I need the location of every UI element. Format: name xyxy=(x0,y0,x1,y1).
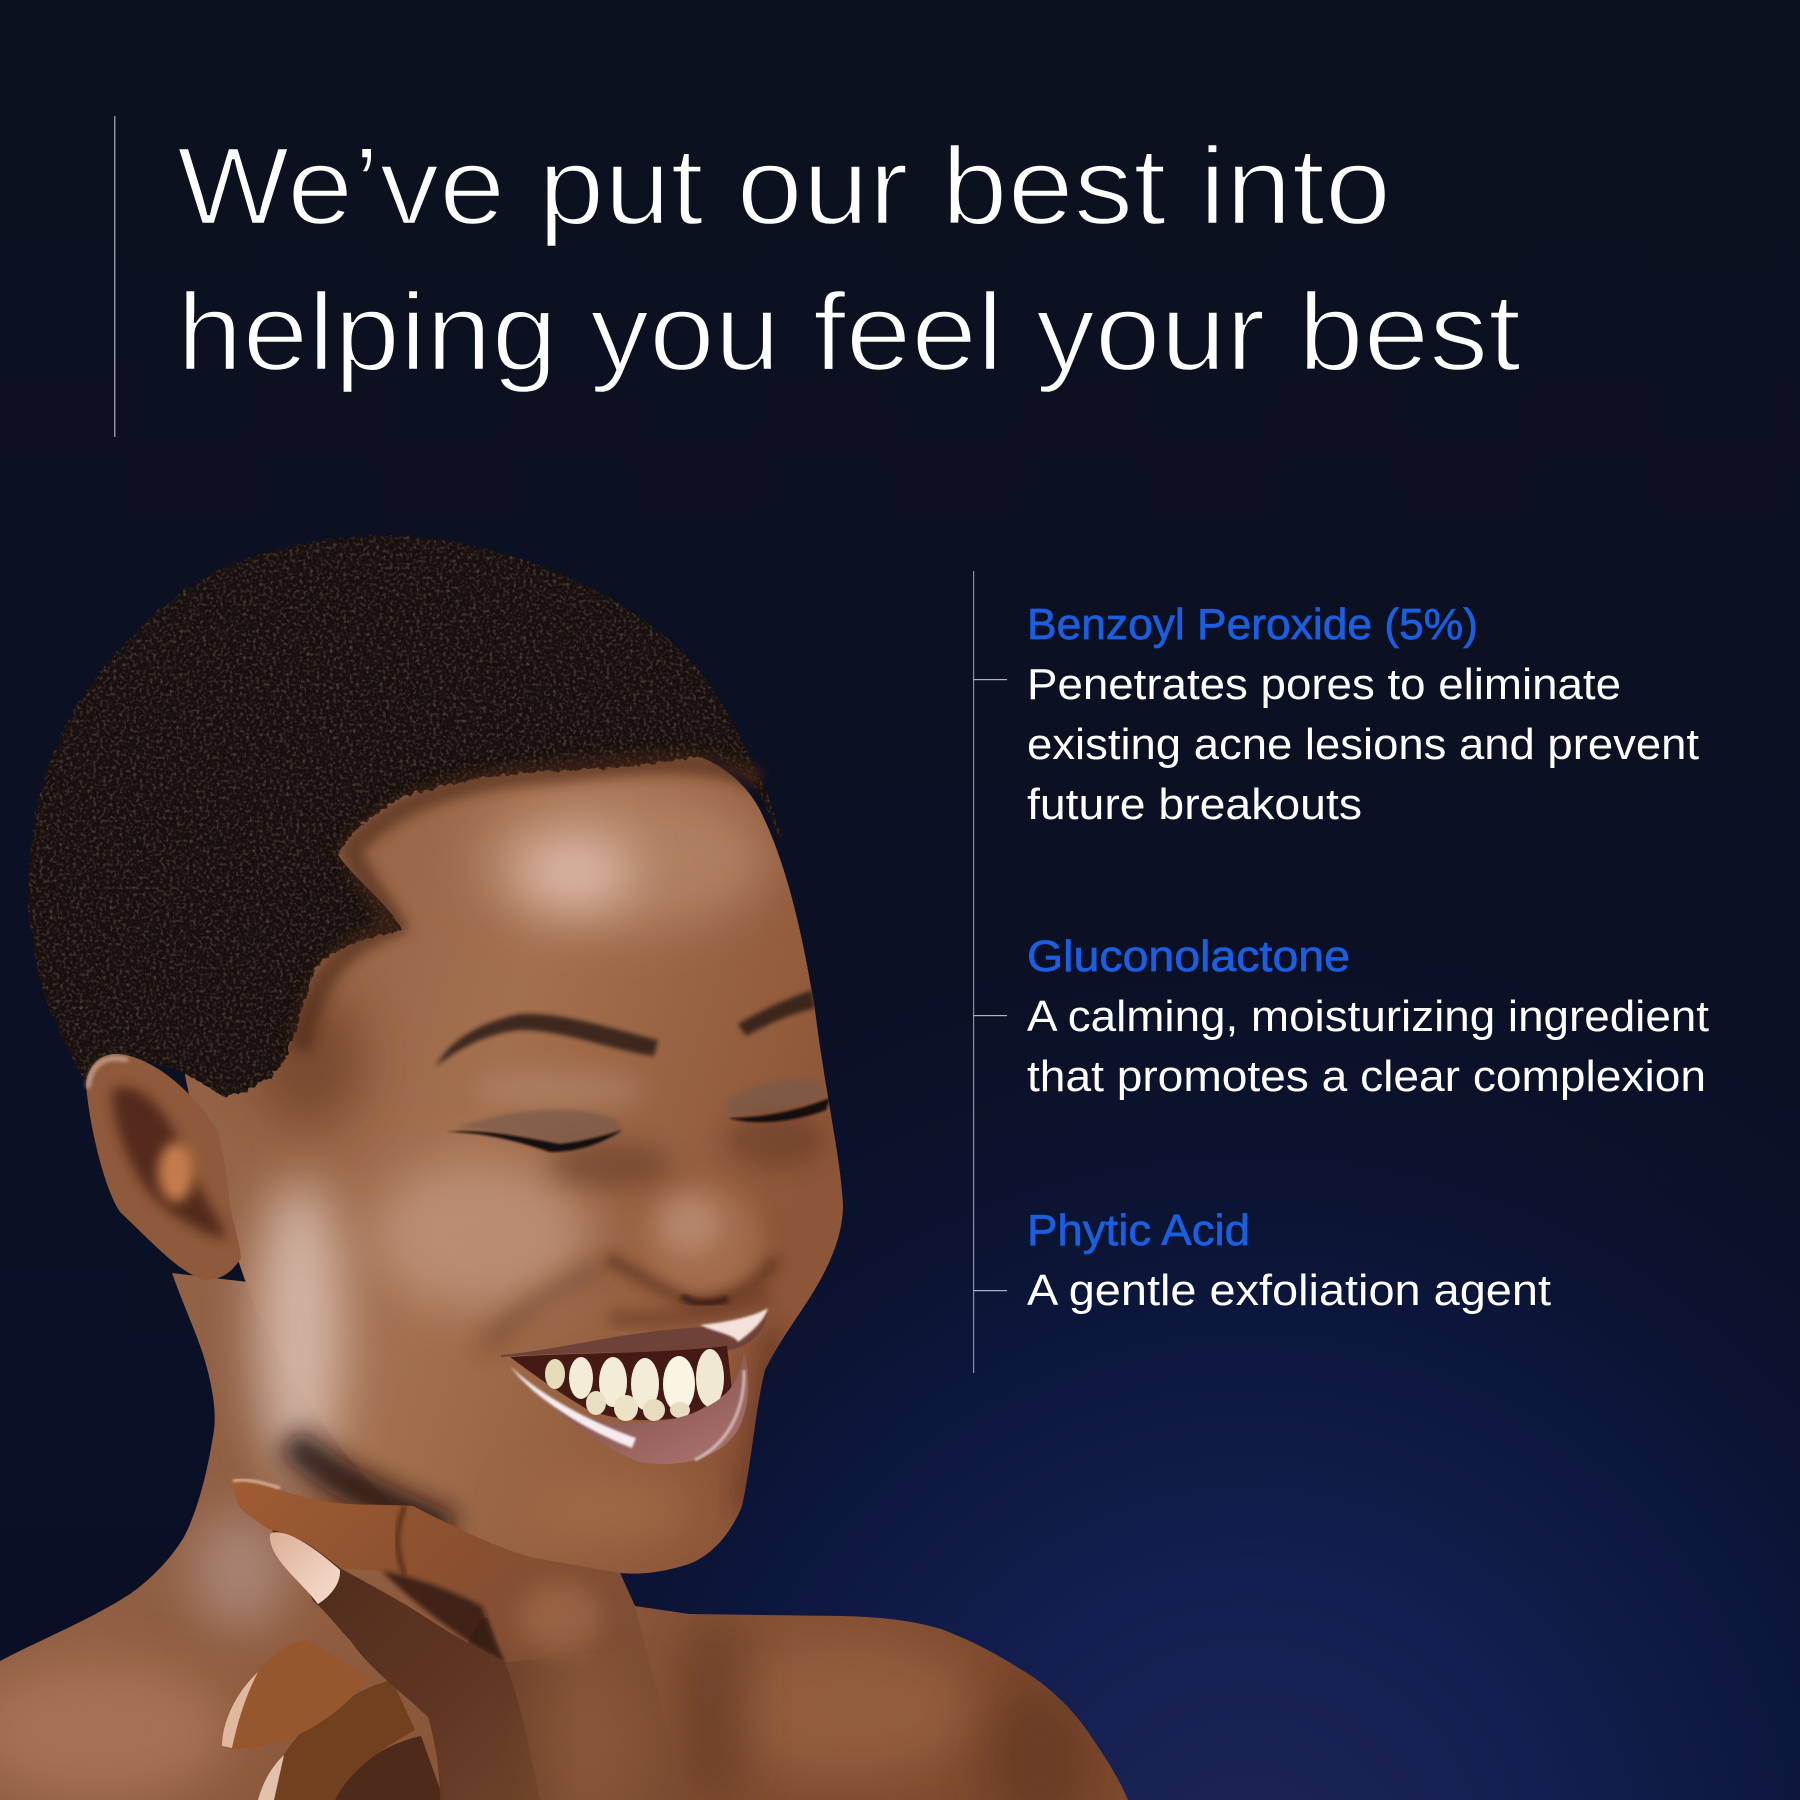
ingredient: benzoyl peroxide: Penetrates pores to eliminate xyxy=(1027,660,1621,709)
ear xyxy=(86,1054,241,1280)
ingredient: phytic acid xyxy=(1027,1206,1551,1315)
left eye closed xyxy=(446,1110,622,1152)
ingredient: phytic acid: A gentle exfoliation agent xyxy=(1027,1266,1551,1315)
middle finger xyxy=(222,1640,370,1749)
left eyebrow xyxy=(436,1014,658,1066)
finger gap shadow xyxy=(382,1571,505,1662)
little finger xyxy=(330,1736,444,1800)
smile crease xyxy=(484,1266,604,1348)
middle fingernail xyxy=(222,1672,258,1748)
thumb xyxy=(272,1530,540,1800)
hand back xyxy=(428,1573,685,1800)
title block xyxy=(114,116,1521,437)
ingredient: benzoyl peroxide xyxy=(1027,600,1699,829)
nose xyxy=(606,1258,776,1303)
neck and shoulders xyxy=(0,1273,1128,1800)
ingredient: benzoyl peroxide: existing acne lesions and prevent xyxy=(1027,720,1699,769)
portrait: smiling woman xyxy=(0,536,1128,1800)
ingredient: benzoyl peroxide: Benzoyl Peroxide (5%) xyxy=(1027,600,1478,649)
ring finger xyxy=(262,1680,415,1800)
right eyebrow xyxy=(738,990,815,1036)
index finger xyxy=(233,1481,640,1662)
thumb nail xyxy=(270,1532,340,1604)
hand xyxy=(222,1480,685,1800)
ingredient list timeline xyxy=(973,571,1007,1373)
hair xyxy=(29,536,786,1097)
hairline fade xyxy=(300,763,760,1050)
ingredient: gluconolactone: A calming, moisturizing ingredient xyxy=(1027,992,1709,1041)
ingredient: gluconolactone: that promotes a clear complexion xyxy=(1027,1052,1706,1101)
ingredient: benzoyl peroxide: future breakouts xyxy=(1027,780,1362,829)
skin shading xyxy=(0,790,1090,1800)
head skin xyxy=(170,740,843,1574)
ingredient: gluconolactone: Gluconolactone xyxy=(1027,932,1350,981)
ring fingernail xyxy=(258,1755,284,1800)
mouth xyxy=(501,1308,768,1464)
right eye closed xyxy=(726,1079,830,1122)
title block: helping you feel your best xyxy=(177,271,1521,394)
knuckle details xyxy=(518,1582,602,1654)
title block: We’ve put our best into xyxy=(177,125,1391,248)
ingredient: phytic acid: Phytic Acid xyxy=(1027,1206,1250,1255)
ingredient: gluconolactone xyxy=(1027,932,1709,1101)
